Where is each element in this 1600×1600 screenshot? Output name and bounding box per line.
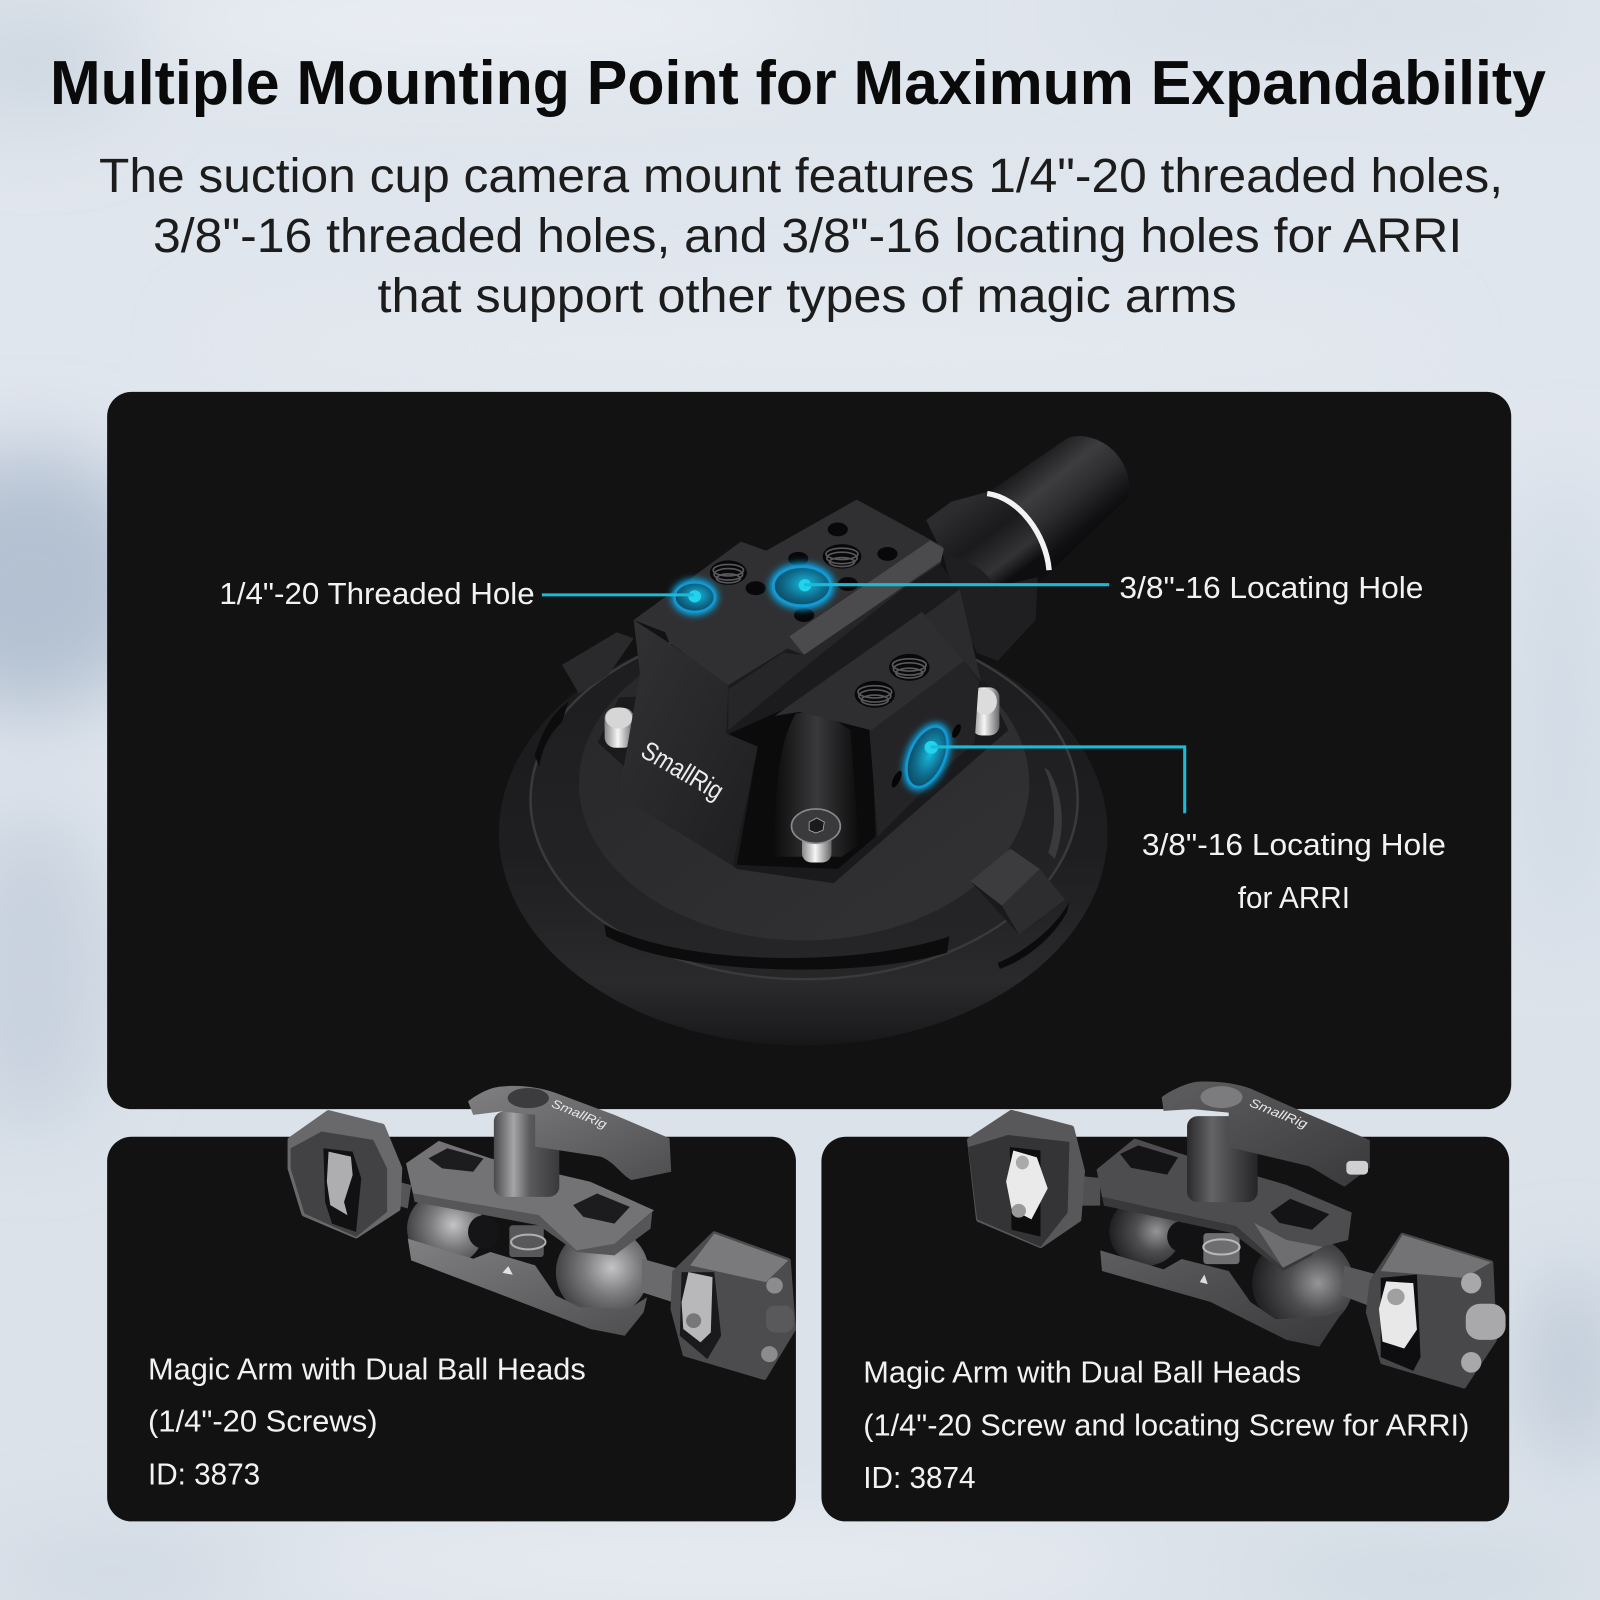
spring post — [509, 1225, 546, 1257]
text: magic arm 3873: (1/4"-20 Screws) — [148, 1405, 378, 1439]
lever handle: SmallRig — [549, 1096, 609, 1131]
subtitle text block: The suction cup camera mount features 1/4"-20 threaded holes, — [99, 150, 1503, 203]
base plate — [598, 681, 1008, 883]
left silver screw — [605, 707, 634, 748]
lever handle: SmallRig — [1247, 1095, 1310, 1131]
product: magic arm 3873 — [291, 1086, 793, 1378]
callout line: ARRI locating hole — [931, 747, 1185, 813]
panel: suction cup mount — [107, 392, 1511, 1109]
subtitle text block: that support other types of magic arms — [378, 270, 1237, 323]
SmallRig logo: SmallRig — [636, 735, 729, 806]
right stem — [642, 1259, 678, 1302]
upper clamp plate — [1097, 1138, 1352, 1271]
label: 3/8"-16 locating hole for ARRI: 3/8"-16 Locating Hole — [1142, 828, 1446, 862]
upper clamp plate — [406, 1141, 654, 1255]
label: 3/8"-16 locating hole for ARRI: for ARRI — [1238, 881, 1350, 915]
right ball — [556, 1227, 649, 1317]
glowing hole: ARRI — [890, 716, 963, 798]
text: magic arm 3873: Magic Arm with Dual Ball Heads — [148, 1353, 586, 1387]
lever handle — [468, 1086, 671, 1180]
suction cup base — [499, 620, 1108, 1045]
left ball — [1109, 1197, 1182, 1266]
left clamp — [968, 1113, 1100, 1247]
main body — [619, 551, 981, 869]
text: magic arm 3874: (1/4"-20 Screw and locating Screw for ARRI) — [863, 1409, 1469, 1443]
ball socket shadow — [468, 1215, 499, 1249]
text: magic arm 3874 — [863, 1356, 1469, 1495]
text: magic arm 3873: ID: 3873 — [148, 1458, 260, 1492]
label: 3/8"-16 locating hole: 3/8"-16 Locating Hole — [1119, 571, 1423, 605]
text: magic arm 3874: ID: 3874 — [863, 1461, 976, 1495]
top thread holes and small pin holes — [710, 522, 930, 708]
knob tube — [926, 436, 1129, 583]
product: suction cup camera mount — [499, 436, 1129, 1045]
right silver screw — [972, 687, 999, 736]
knob column — [494, 1111, 559, 1197]
title: Multiple Mounting Point for Maximum Expandability — [50, 49, 1546, 118]
panel: magic arm 3874 — [821, 1137, 1509, 1521]
label: 3/8"-16 locating hole for ARRI — [1142, 828, 1446, 915]
left rubber tab — [562, 632, 634, 693]
lever handle — [1162, 1082, 1370, 1187]
subtitle text block: 3/8"-16 threaded holes, and 3/8"-16 locating holes for ARRI — [153, 210, 1462, 263]
ball socket shadow — [1167, 1221, 1196, 1252]
rear block behind tube — [943, 555, 1038, 661]
front screw — [791, 809, 840, 862]
callout line: 1/4"-20 threaded hole — [542, 593, 694, 596]
hole threads — [713, 548, 926, 705]
spring post — [1203, 1233, 1240, 1264]
text: magic arm 3874: Magic Arm with Dual Ball Heads — [863, 1356, 1301, 1390]
right ball — [1252, 1235, 1354, 1331]
panel: magic arm 3873 — [107, 1137, 796, 1521]
right clamp — [673, 1234, 793, 1378]
right rubber tab — [970, 849, 1065, 934]
right stem — [1341, 1266, 1377, 1305]
glowing hole: 1/4"-20 — [671, 578, 718, 616]
lower clamp plate — [408, 1239, 647, 1336]
left clamp — [291, 1113, 411, 1237]
right clamp — [1368, 1235, 1506, 1386]
lower clamp plate — [1100, 1250, 1345, 1347]
text: magic arm 3873 — [148, 1353, 586, 1492]
top plate — [634, 500, 944, 685]
product: magic arm 3874 — [968, 1082, 1506, 1386]
subtitle text block — [99, 150, 1503, 323]
left ball — [407, 1191, 484, 1266]
glowing hole: 3/8"-16 — [769, 562, 835, 610]
callout line: 3/8"-16 locating hole — [804, 583, 1109, 586]
knob column — [1187, 1116, 1258, 1202]
label: 1/4"-20 threaded hole: 1/4"-20 Threaded Hole — [219, 577, 535, 611]
